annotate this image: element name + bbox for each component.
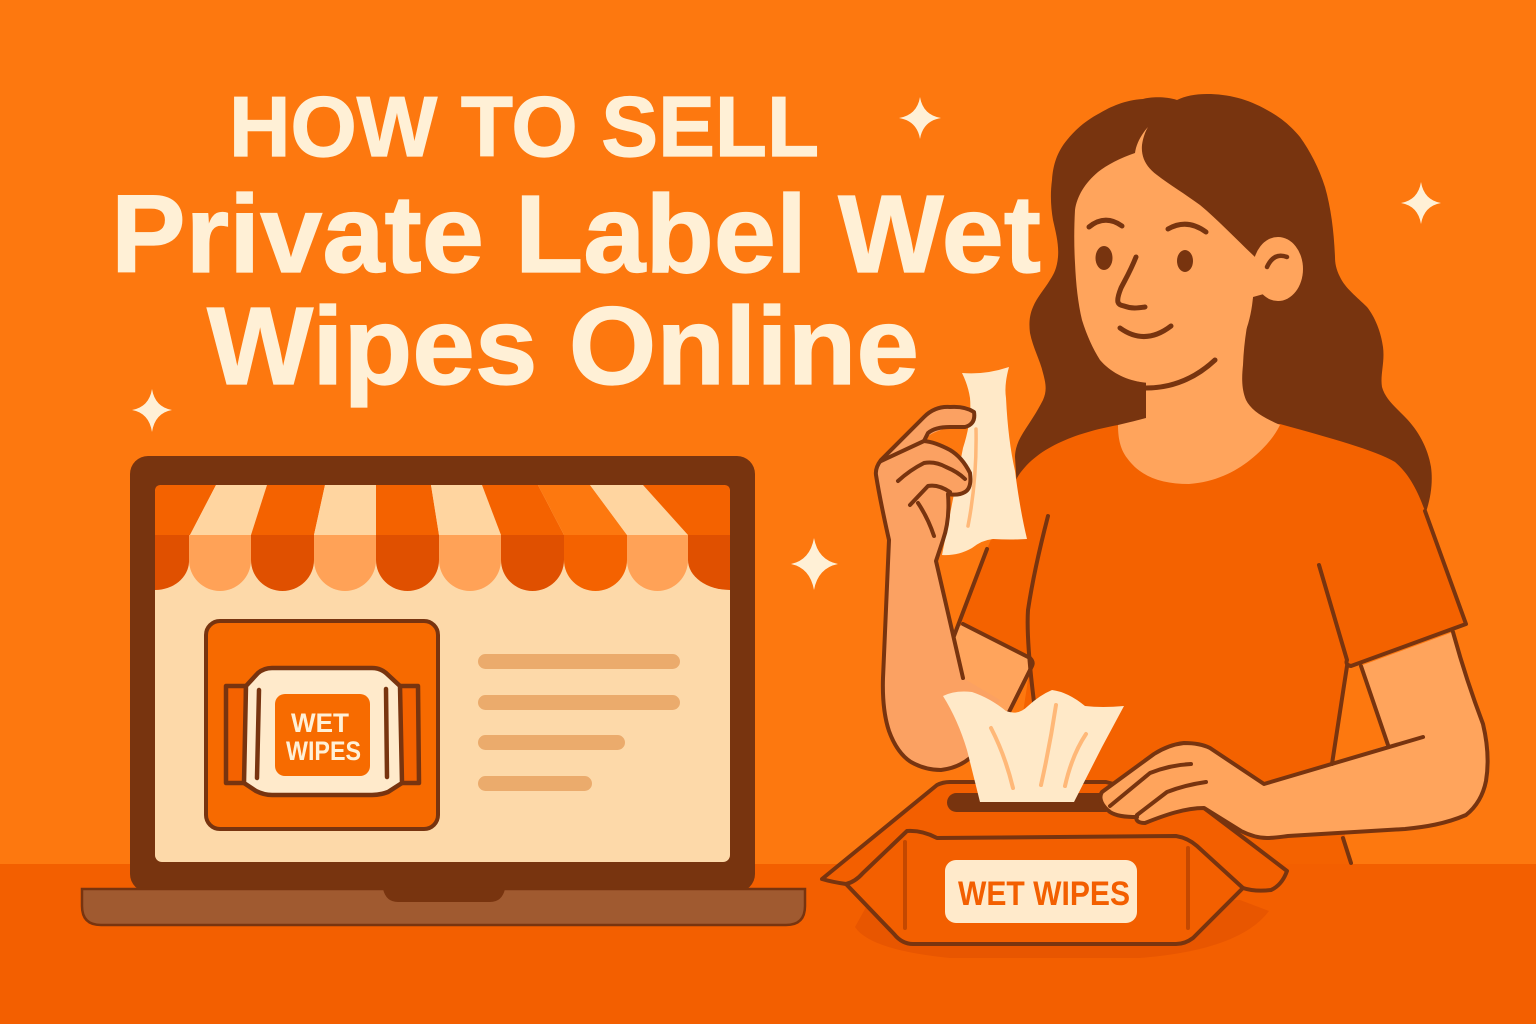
table surface — [0, 864, 1536, 1024]
sparkle top right — [1401, 182, 1441, 224]
jaw line — [1146, 360, 1215, 388]
laptop base — [82, 889, 805, 925]
product card — [206, 621, 438, 829]
pack slot — [947, 793, 1115, 812]
pack side seams — [905, 842, 1188, 928]
right brow — [1168, 224, 1206, 232]
title line 1: HOW TO SELL — [229, 80, 819, 175]
pack label text: WET WIPES — [958, 875, 1130, 913]
title line 2: Private Label Wet — [111, 173, 1041, 296]
pack shadow — [855, 900, 1269, 958]
face — [1074, 127, 1278, 383]
product pack — [226, 668, 419, 795]
woman outlines — [1100, 511, 1488, 863]
hair — [1015, 94, 1432, 515]
laptop body — [130, 456, 755, 892]
held wipe — [942, 367, 1027, 555]
title — [111, 80, 1041, 408]
product pack: WET — [291, 708, 349, 738]
tissue — [943, 690, 1124, 802]
sparkles — [132, 97, 1441, 590]
product pack: WIPES — [286, 736, 361, 766]
tissue creases — [991, 705, 1086, 788]
wet wipes pack — [822, 782, 1287, 958]
right arm and hand — [1100, 632, 1488, 838]
left sleeve and upper arm — [925, 624, 1033, 770]
neck — [1118, 297, 1280, 484]
right arm outline — [1100, 632, 1488, 838]
title line 3: Wipes Online — [207, 285, 919, 408]
laptop notch — [383, 889, 505, 902]
sparkle left — [132, 389, 172, 432]
awning — [155, 485, 730, 591]
left eye — [1096, 246, 1112, 270]
right eye — [1177, 250, 1193, 272]
torso line — [1332, 666, 1388, 764]
woman — [822, 94, 1488, 958]
left arm outlines — [876, 407, 1048, 770]
ear detail — [1267, 256, 1287, 267]
gap between torso and arm — [1332, 666, 1388, 764]
pack label — [945, 860, 1137, 923]
pack body — [822, 782, 1287, 944]
pack flap line — [846, 831, 1243, 888]
laptop — [82, 456, 805, 925]
text placeholder lines — [478, 654, 680, 791]
finger lines — [1110, 764, 1206, 815]
shirt — [958, 424, 1466, 864]
torso lower line — [1343, 838, 1351, 863]
sparkle top centre — [899, 97, 941, 139]
facial features — [1089, 220, 1287, 388]
wipe crease — [968, 429, 976, 526]
mouth — [1120, 326, 1171, 337]
left brow — [1089, 220, 1122, 227]
laptop screen — [155, 485, 730, 862]
ear — [1253, 237, 1303, 301]
left forearm and hand — [876, 407, 1000, 770]
nose — [1118, 257, 1145, 308]
sparkle centre — [791, 538, 838, 590]
shirt outline right — [1319, 511, 1466, 666]
